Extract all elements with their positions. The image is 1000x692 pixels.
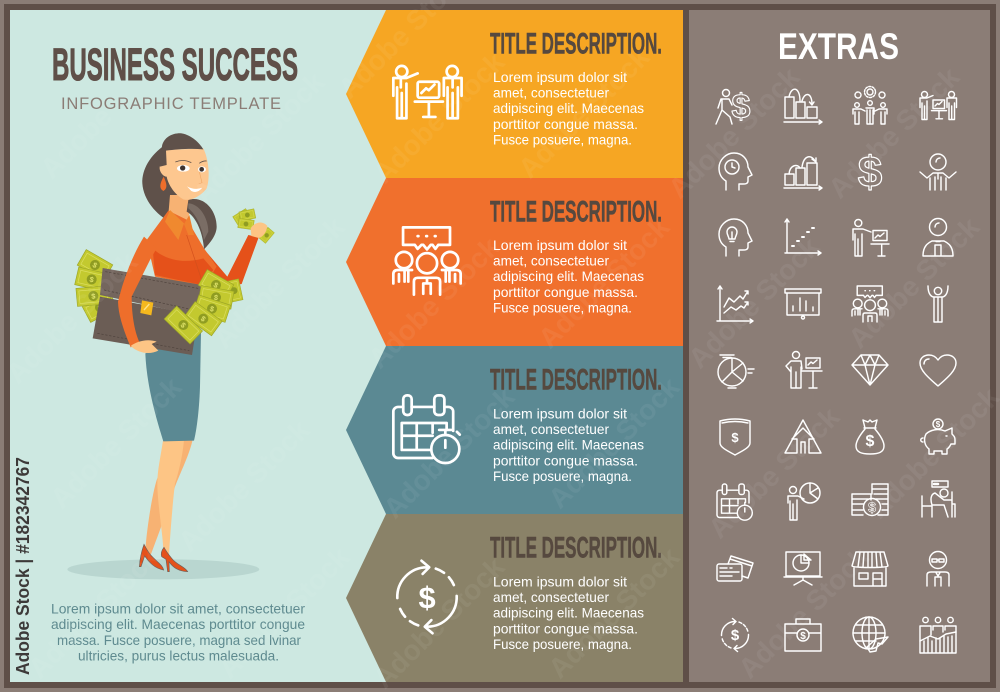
watermarks: Adobe Stock (207, 211, 351, 354)
watermarks: Adobe Stock (367, 551, 511, 692)
band 3 text (490, 364, 662, 484)
icon: man with board and desk (786, 352, 822, 388)
icon grid: extras (716, 86, 956, 653)
icon: team meeting (band 2) (393, 227, 461, 295)
band 1 text: porttitor congue massa. (493, 117, 638, 132)
eyes and brows (175, 160, 207, 163)
icon: rising bar chart (784, 157, 822, 190)
briefcase flap (100, 268, 202, 315)
band 4 text: TITLE DESCRIPTION. (490, 532, 662, 564)
icon: man with open arms (920, 154, 956, 190)
icon: briefcase with dollar (785, 619, 821, 651)
band 4 text (490, 532, 662, 652)
back leg (145, 438, 193, 555)
top hair (160, 133, 203, 167)
band 4 text: adipiscing elit. Maecenas (493, 606, 644, 620)
watermarks: Adobe Stock (822, 61, 966, 204)
icon: heart (920, 355, 956, 386)
main title: BUSINESS SUCCESS (52, 39, 298, 90)
icon: globe with map (853, 617, 888, 652)
icon: pie chart with labels (718, 355, 754, 388)
icon: presentation with pie chart (784, 552, 822, 585)
band 3 text: porttitor congue massa. (493, 454, 638, 468)
icon: team discussion (852, 286, 888, 322)
neck (168, 195, 192, 220)
footer text block: massa. Fusce posuere, magna sed lvinar (57, 633, 301, 648)
watermarks: Adobe Stock (0, 246, 144, 389)
icon: scatter plot (785, 219, 821, 255)
money left of the briefcase: $ (91, 260, 99, 270)
icon: shield with dollar: $ (731, 430, 739, 445)
band 1 text (490, 28, 662, 148)
icon: money cycle (band 4): $ (418, 580, 436, 615)
watermarks: Adobe Stock (44, 371, 188, 514)
band 2 text: TITLE DESCRIPTION. (490, 196, 662, 228)
watermarks: Adobe Stock (842, 211, 986, 354)
watermarks: Adobe Stock (542, 371, 686, 514)
icon: growth line chart (717, 286, 753, 323)
icon: triangle with arrow (785, 420, 821, 453)
right shoe (161, 547, 188, 572)
band 1 text: TITLE DESCRIPTION. (490, 28, 662, 60)
smile (187, 186, 202, 192)
icon: presenters with monitor (band 1) (393, 66, 462, 118)
money right of the briefcase: $ (212, 280, 220, 290)
icon: walking man with dollar: $ (732, 88, 751, 126)
band 4 text: Fusce posuere, magna. (493, 637, 632, 652)
icon: shield with dollar (720, 419, 750, 455)
icon: man with glasses (927, 552, 949, 586)
watermarks: Adobe (34, 101, 118, 184)
watermarks: Adobe Stock (22, 541, 166, 684)
band 2 text: Lorem ipsum dolor sit (493, 238, 627, 253)
watermarks: Adobe Stock (702, 401, 846, 544)
money right of the briefcase: $ (179, 320, 188, 330)
band 4 text: Lorem ipsum dolor sit (493, 574, 627, 590)
watermarks: Adobe Stock (542, 541, 686, 684)
band 2 text: porttitor congue massa. (493, 285, 638, 300)
icon: presenter with screen (853, 220, 889, 256)
watermarks: Adobe Stock (662, 61, 806, 204)
watermarks: Adobe Stock (532, 211, 676, 354)
clasp (140, 300, 153, 315)
band: teal chevron (346, 346, 683, 514)
icon: shop (852, 552, 888, 586)
icon: presentation board (785, 289, 821, 319)
band: orange chevron (346, 178, 683, 346)
icon: diamond (852, 355, 888, 385)
icon: people with growth chart (920, 617, 956, 653)
band: olive chevron (346, 514, 683, 682)
band 3 text: Lorem ipsum dolor sit (493, 406, 627, 422)
front hair tail (187, 199, 217, 249)
icon: head with light bulb (719, 219, 752, 256)
blouse waist shading (153, 248, 213, 285)
band 3 text: amet, consectetuer (493, 422, 609, 437)
raised hand (251, 222, 267, 238)
icon: money rotation: $ (731, 627, 740, 644)
band 1 text: amet, consectetuer (493, 86, 609, 100)
band 3 text: TITLE DESCRIPTION. (490, 364, 662, 396)
back hair (142, 145, 190, 222)
money right of the briefcase: $ (199, 314, 208, 324)
icon: coin stacks: $ (868, 499, 876, 515)
band 1 text: Fusce posuere, magna. (493, 132, 632, 148)
icon: money bag (856, 420, 884, 454)
briefcase body (93, 297, 198, 355)
icon: money cycle (band 4) (397, 561, 457, 633)
watermarks: Adobe Stock (172, 414, 316, 557)
icon: team with gears (853, 86, 887, 124)
icon: falling bar chart (784, 89, 822, 124)
watermarks: Adobe Stock (367, 46, 511, 189)
icon: money bag: $ (866, 433, 875, 450)
band 3 text: Fusce posuere, magna. (493, 469, 632, 484)
watermarks: Adobe Stock (682, 231, 826, 374)
band 2 text: Fusce posuere, magna. (493, 300, 632, 316)
money left of the briefcase: $ (96, 303, 104, 312)
band 3 text: adipiscing elit. Maecenas (493, 438, 644, 452)
icon: person at desk with battery (922, 481, 955, 517)
watermarks: Adobe Stock (512, 41, 656, 184)
watermarks: Adobe Stock (362, 231, 506, 374)
extras heading: EXTRAS (778, 26, 899, 67)
raised arm (203, 235, 259, 287)
lower hand (131, 340, 158, 353)
money left of the briefcase (75, 250, 118, 322)
left-hand cash, behind fingers (233, 209, 274, 243)
footer text block: adipiscing elit. Maecenas porttitor congue (51, 617, 305, 632)
blouse torso (147, 211, 217, 287)
left panel background (10, 10, 683, 682)
band 2 text: adipiscing elit. Maecenas (493, 269, 644, 284)
money right of the briefcase (164, 270, 243, 344)
band 1 text: Lorem ipsum dolor sit (493, 70, 627, 85)
icon: credit cards (717, 556, 753, 581)
face (160, 148, 209, 200)
earring (160, 177, 166, 191)
icon: walking man with dollar (716, 88, 751, 126)
money right of the briefcase: $ (209, 304, 215, 314)
icon: head with clock (719, 153, 752, 190)
icon: dollar sign: $ (858, 148, 882, 197)
icon: man with pie chart (788, 483, 820, 520)
band 2 text (490, 196, 662, 316)
icon: business person bust (923, 218, 953, 256)
icon: piggy bank: $ (936, 420, 941, 429)
band 2 text: amet, consectetuer (493, 254, 609, 268)
collar (165, 210, 184, 240)
skirt (145, 332, 201, 441)
watermarks: Adobe Stock (732, 541, 876, 684)
watermarks: Adobe Stock (377, 381, 521, 524)
icon: winner with raised arms (928, 286, 948, 322)
illustration: businesswoman with briefcase full of money (67, 133, 274, 579)
icon: calendar with timer (717, 484, 752, 520)
front leg (157, 438, 184, 555)
icon: piggy bank (921, 419, 955, 454)
front arm (118, 237, 157, 347)
footer text block (51, 602, 305, 664)
footer text block: Lorem ipsum dolor sit amet, consectetuer (51, 602, 305, 616)
watermarks: Adobe Stock (187, 66, 331, 209)
icon: two presenters (920, 92, 956, 120)
band 1 text: adipiscing elit. Maecenas (493, 101, 644, 116)
band 4 text: porttitor congue massa. (493, 622, 638, 636)
watermarks: Adobe Stock (212, 541, 356, 684)
icon: money rotation (721, 618, 749, 652)
band 4 text: amet, consectetuer (493, 590, 609, 605)
money left of the briefcase: $ (91, 292, 96, 301)
ground shadow (67, 559, 259, 579)
money right of the briefcase: $ (213, 293, 219, 302)
band: orange-yellow chevron (346, 10, 683, 178)
vertical stock credit: Adobe Stock | #182342767 (13, 457, 33, 675)
right panel background (689, 10, 990, 682)
icon: briefcase with dollar: $ (800, 631, 806, 642)
subtitle: INFOGRAPHIC TEMPLATE (61, 95, 281, 113)
money left of the briefcase: $ (89, 275, 95, 284)
footer text block: ultricies, purus lectus malesuada. (78, 648, 279, 664)
left shoe (139, 544, 164, 570)
icon: calendar with stopwatch (band 3) (393, 395, 460, 463)
icon: coin stacks (852, 484, 888, 516)
